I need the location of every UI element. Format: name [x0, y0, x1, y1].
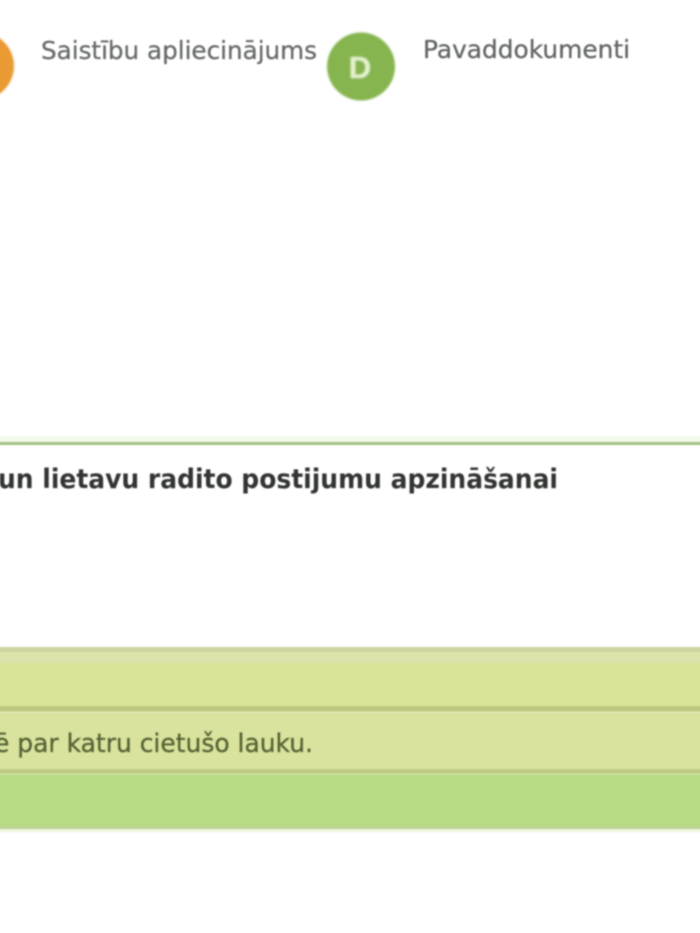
row 3: [0, 774, 700, 832]
table: green rows: [0, 647, 700, 832]
row divider: [0, 769, 700, 774]
row 2 text: ē par katru cietušo lauku.: [0, 729, 313, 759]
label: Saistību apliecinājums: Saistību apliecinājums: [41, 36, 317, 65]
row 2: [0, 712, 700, 770]
label: Pavaddokumenti: Pavaddokumenti: [423, 35, 630, 64]
icon: green D step circle: [327, 32, 395, 100]
heading: section title: un lietavu radito postijumu apzināšanai: [0, 464, 558, 495]
icon: orange step circle (cropped): [0, 32, 14, 100]
row 1: [0, 647, 700, 707]
row divider: [0, 706, 700, 712]
panel: section header rule: [0, 436, 700, 445]
icon: green D step circle: D: [349, 50, 371, 85]
